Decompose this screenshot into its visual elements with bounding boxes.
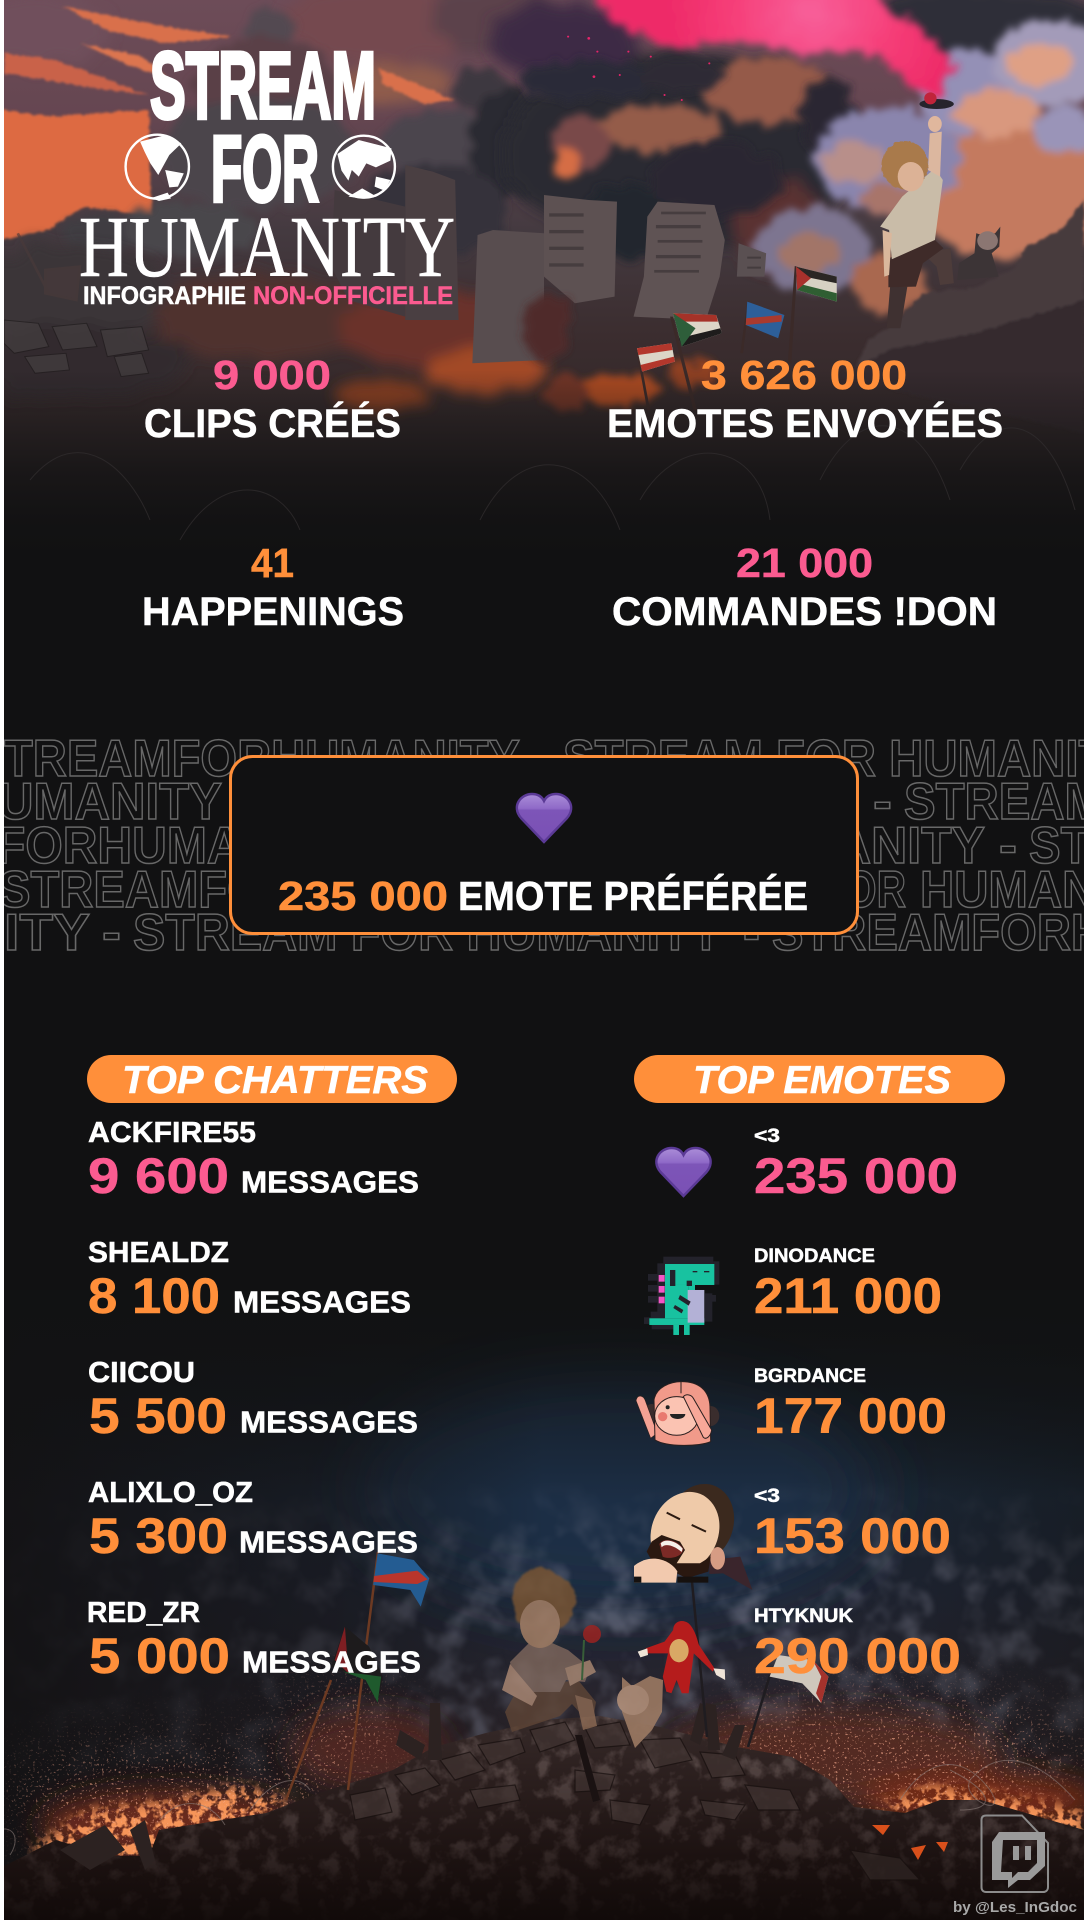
icon: black flag — [709, 1557, 752, 1590]
chatter 5 — [87, 1597, 421, 1684]
emote 2: 211 000 — [754, 1268, 942, 1324]
left sky and smoke — [0, 0, 558, 410]
logo word: FOR: FOR — [211, 116, 319, 221]
stat: don commands — [612, 540, 997, 634]
icon: pink dancing blob with headphones — [636, 1382, 719, 1445]
emote 3: BGRDANCE — [754, 1366, 866, 1387]
chatter 1: MESSAGES — [241, 1166, 419, 1200]
rubble pile behind boy — [857, 200, 1084, 366]
lavender and peach clouds — [754, 20, 1088, 313]
barbed wire — [0, 1760, 1075, 1855]
emote 4: <3 — [754, 1486, 780, 1507]
icon: pixel dinosaur — [644, 1257, 719, 1335]
chatter 3 — [88, 1357, 418, 1444]
dark smoke over the brown clouds — [516, 58, 854, 260]
barbed wire — [30, 426, 1075, 540]
illustration: war-torn sky with boy and smoke flare — [0, 0, 1088, 562]
chatter 3: MESSAGES — [240, 1406, 418, 1440]
outlined text band: STREAM FOR HUMANITY — [133, 904, 722, 962]
icon: cat — [962, 226, 1000, 268]
icon: cat on rubble — [617, 1676, 663, 1748]
outlined text band: - — [541, 730, 559, 788]
outlined text band: - — [102, 904, 121, 962]
chatter 1 — [88, 1117, 419, 1204]
outlined text band: ANITY — [835, 817, 985, 875]
icon: DRC flag — [744, 302, 784, 338]
stat: emotes sent: EMOTES ENVOYÉES — [607, 402, 1003, 446]
favourite emote text: EMOTE PRÉFÉRÉE — [458, 873, 808, 919]
panel: top emotes — [634, 1055, 1005, 1693]
emote 2: DINODANCE — [754, 1246, 875, 1267]
icon: boy holding a flare — [880, 92, 954, 328]
heading pill: top chatters: TOP CHATTERS — [122, 1059, 428, 1102]
fade to dark — [4, 370, 1084, 562]
emote 3: 177 000 — [754, 1388, 947, 1444]
subtitle — [83, 282, 453, 310]
rubble rocks — [350, 1722, 920, 1880]
stat: clips — [144, 352, 401, 446]
chatter 4: ALIXLO_OZ — [88, 1477, 253, 1509]
outlined text band: FOR — [820, 861, 906, 919]
panel: favourite emote — [230, 756, 858, 934]
outlined text band: TREAMFORHUMANITY — [4, 730, 520, 788]
icon: globe Eurasia — [333, 136, 395, 199]
subtitle: INFOGRAPHIE — [83, 282, 246, 310]
outlined text band: UMANITY — [0, 773, 222, 831]
icon: Lebanese flag — [636, 343, 675, 411]
chatter 2: 8 100 — [88, 1268, 220, 1324]
outlined text band — [0, 730, 1088, 962]
outlined text band: - — [873, 773, 892, 831]
stat: clips: 9 000 — [213, 352, 331, 398]
chatter 4: MESSAGES — [239, 1526, 418, 1560]
icon: Palestinian flag — [331, 1627, 383, 1703]
logo word: STREAM: STREAM — [150, 33, 376, 139]
chatter 4 — [88, 1477, 418, 1564]
fire glow — [40, 1710, 1088, 1859]
emote 5 — [638, 1606, 961, 1693]
chatter 5: RED_ZR — [87, 1597, 200, 1629]
chatter 3: 5 500 — [89, 1388, 227, 1444]
icon: rubble posts and fallen beams — [60, 1703, 745, 1870]
bright fires — [26, 1778, 1084, 1856]
outlined text band: - — [743, 904, 760, 962]
stat: emotes sent — [607, 352, 1003, 446]
ruined buildings — [544, 195, 766, 320]
icon: laughing streamer face — [634, 1475, 744, 1583]
outlined text band: - — [999, 817, 1017, 875]
icon: Lebanese flag — [770, 1655, 828, 1703]
icon: Palestinian flag — [790, 266, 837, 330]
emote 2 — [644, 1246, 942, 1335]
illustration: boy at dusk on rubble mound — [4, 1355, 1084, 1920]
favourite emote text: 235 000 — [278, 873, 448, 919]
subtitle: NON-OFFICIELLE — [253, 282, 453, 310]
pink spatter — [567, 36, 710, 101]
emote 4: 153 000 — [754, 1508, 951, 1564]
chatter 2 — [88, 1237, 411, 1324]
red haze and fires — [523, 290, 716, 413]
rubble mound — [4, 1700, 1084, 1920]
outlined text band: ITY — [4, 904, 90, 962]
chatter 4: 5 300 — [89, 1508, 228, 1564]
outlined text band: STREAMFORHUMANITY — [0, 861, 547, 919]
emote 4 — [634, 1475, 951, 1583]
icon: twitch document logo — [982, 1816, 1048, 1892]
credit: by @Les_InGdoc — [953, 1899, 1077, 1916]
emote 1 — [656, 1126, 958, 1204]
chatter 1: ACKFIRE55 — [88, 1117, 256, 1149]
chatter 2: SHEALDZ — [88, 1237, 229, 1269]
favourite emote text — [278, 873, 808, 919]
logo: Stream for Humanity — [79, 33, 455, 310]
stat: clips: CLIPS CRÉÉS — [144, 402, 401, 446]
icon: flag poles — [286, 1552, 770, 1800]
chatter 3: CIICOU — [88, 1357, 195, 1389]
icon: red creature — [638, 1621, 725, 1693]
chatter 5: 5 000 — [89, 1628, 230, 1684]
icon: globe Americas — [126, 135, 189, 201]
glowing cracks — [872, 1825, 948, 1860]
emote 1: 235 000 — [754, 1148, 958, 1204]
outlined text band: FORHUMANITY — [0, 817, 351, 875]
icon: purple heart — [517, 794, 571, 842]
heading pill: top emotes — [634, 1055, 1005, 1103]
icon: DRC flag — [373, 1553, 429, 1607]
stat: happenings — [142, 540, 404, 634]
logo word: HUMANITY: HUMANITY — [79, 198, 455, 295]
emote 3 — [636, 1366, 947, 1445]
dark base — [4, 562, 1084, 1290]
chatter 1: 9 600 — [88, 1148, 229, 1204]
icon: kneeling boy holding a poppy — [502, 1568, 601, 1732]
stat: happenings: HAPPENINGS — [142, 590, 404, 634]
emote 5: 290 000 — [754, 1628, 961, 1684]
right sky and clouds — [489, 0, 1088, 433]
chatter 2: MESSAGES — [233, 1286, 411, 1320]
pink smoke plume — [589, 0, 954, 98]
mottled smoke — [120, 1506, 1084, 1778]
stat: don commands: COMMANDES !DON — [612, 590, 997, 634]
heading pill: top emotes: TOP EMOTES — [693, 1059, 951, 1102]
ember sparks — [4, 1650, 1084, 1880]
emote 5: HTYKNUK — [754, 1606, 853, 1627]
rubble stones — [4, 320, 149, 377]
icon: Sudanese flag — [670, 313, 722, 393]
stat: don commands: 21 000 — [736, 540, 873, 586]
emote 1: <3 — [754, 1126, 780, 1147]
stat: emotes sent: 3 626 000 — [701, 352, 907, 398]
building group left — [331, 165, 544, 363]
panel: top chatters — [87, 1055, 457, 1684]
windows — [549, 212, 761, 273]
stat: happenings: 41 — [251, 540, 294, 586]
chatter 5: MESSAGES — [242, 1646, 421, 1680]
